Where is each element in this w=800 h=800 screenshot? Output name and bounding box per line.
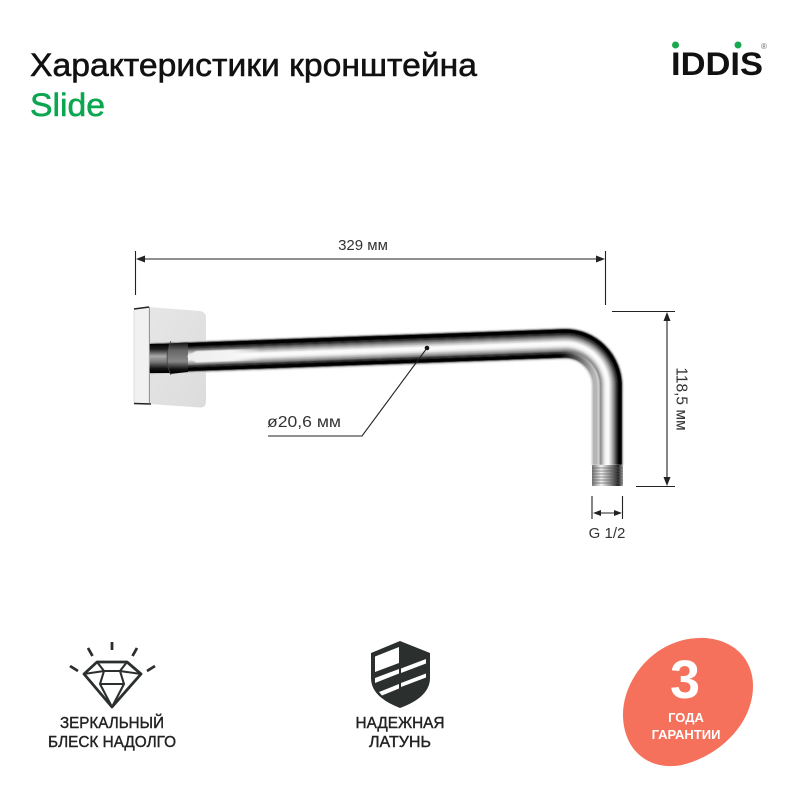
label: НАДЕЖНАЯ: [356, 715, 444, 732]
threaded end: [592, 465, 623, 486]
icon: diamond: [70, 642, 155, 707]
subtitle: model name: Slide: [30, 87, 105, 123]
dimension: height 118,5 mm: [612, 312, 690, 486]
feature: mirror shine: [48, 642, 176, 751]
feature: reliable brass: [356, 641, 444, 751]
dimension: overall length 329 mm: 329 мм: [338, 237, 388, 254]
label: ЗЕРКАЛЬНЫЙ: [60, 714, 164, 732]
dimension: overall length 329 mm: [136, 237, 606, 305]
logo: IDDIS: ®: [761, 42, 767, 51]
dimension: thread G 1/2: [589, 496, 625, 542]
warranty number: 3: [670, 650, 700, 710]
warranty text: [652, 710, 720, 742]
socket at wall: [150, 344, 170, 373]
warranty badge: [623, 638, 753, 766]
tube with bend: [150, 328, 623, 465]
logo: IDDIS: IDDIS: [671, 46, 763, 82]
label: [356, 715, 444, 751]
shower arm product drawing: [134, 307, 623, 486]
dimension: height 118,5 mm: 118,5 мм: [672, 367, 690, 431]
label: БЛЕСК НАДОЛГО: [48, 734, 176, 751]
dimension: diameter leader: ø20,6 мм: [267, 414, 341, 431]
warranty text: ГОДА: [668, 710, 705, 725]
badge blob: [623, 638, 753, 766]
title: Характеристики кронштейна: [30, 47, 477, 83]
label: ЛАТУНЬ: [369, 734, 431, 751]
tube highlight tip: [187, 348, 262, 362]
label: [48, 714, 176, 751]
warranty text: ГАРАНТИИ: [652, 727, 720, 742]
dimension: diameter leader: [267, 346, 429, 436]
icon: shield: [371, 641, 430, 708]
dimension: thread G 1/2: G 1/2: [589, 525, 625, 542]
wall plate: [134, 307, 206, 408]
